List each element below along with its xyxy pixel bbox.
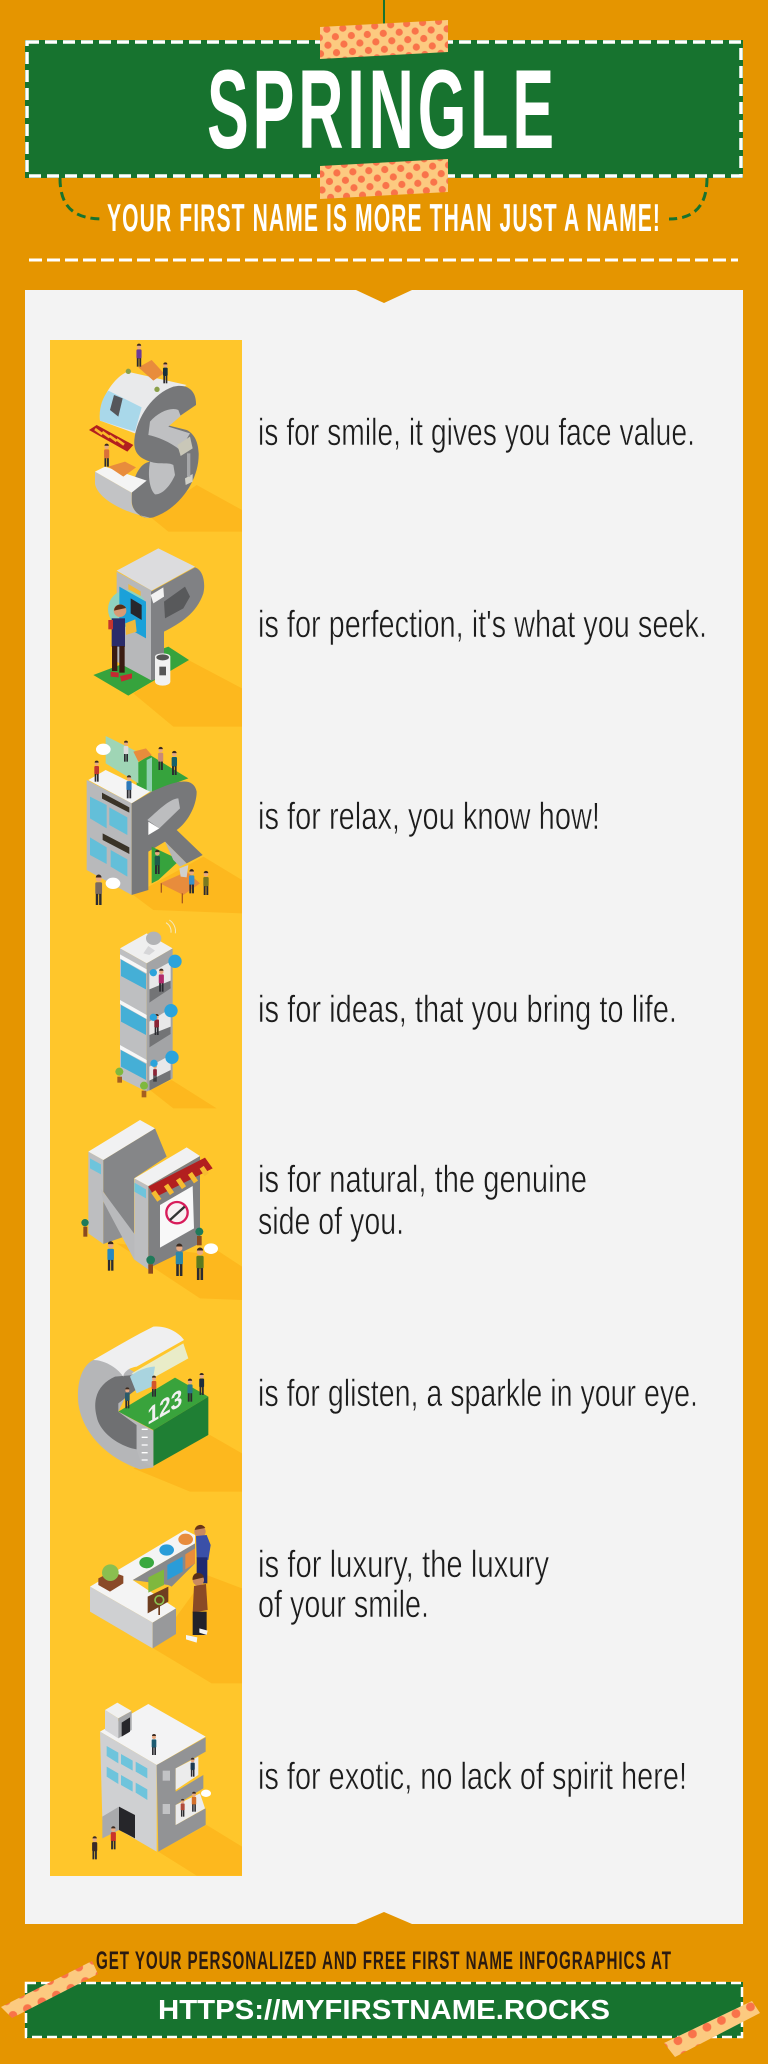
illustration: letter G xyxy=(78,1326,242,1492)
illustration: letter P xyxy=(93,548,242,727)
tape: right xyxy=(664,2001,760,2057)
bracket: right xyxy=(669,178,707,219)
text: L: of your smile. xyxy=(258,1584,429,1626)
tape: top xyxy=(320,20,448,59)
illustration: letter S xyxy=(89,344,242,532)
illustration: letter I xyxy=(115,920,217,1108)
footer xyxy=(1,1947,760,2057)
hanging line xyxy=(383,0,385,24)
illustration: letter N xyxy=(81,1120,242,1300)
panel: yellow illustration column xyxy=(50,340,242,1876)
illustration: letter G: 123 xyxy=(147,1384,182,1431)
illustration: letter R xyxy=(87,736,242,913)
text: L: is for luxury, the luxury xyxy=(258,1544,549,1586)
text: N: side of you. xyxy=(258,1201,404,1243)
divider xyxy=(29,258,738,262)
tape: left xyxy=(1,1961,98,2018)
header xyxy=(25,0,743,240)
text: N xyxy=(258,1159,587,1243)
panel: content xyxy=(25,290,743,1924)
text: R: is for relax, you know how! xyxy=(258,796,600,838)
tape: bottom xyxy=(320,159,448,199)
text: L xyxy=(258,1544,549,1626)
url: HTTPS://MYFIRSTNAME.ROCKS xyxy=(158,1994,610,2025)
url banner xyxy=(25,1982,743,2038)
illustration: letter E xyxy=(92,1703,242,1876)
illustration: letter L xyxy=(90,1525,242,1683)
text: N: is for natural, the genuine xyxy=(258,1159,587,1201)
bracket: left xyxy=(60,178,103,219)
title banner xyxy=(25,40,743,178)
